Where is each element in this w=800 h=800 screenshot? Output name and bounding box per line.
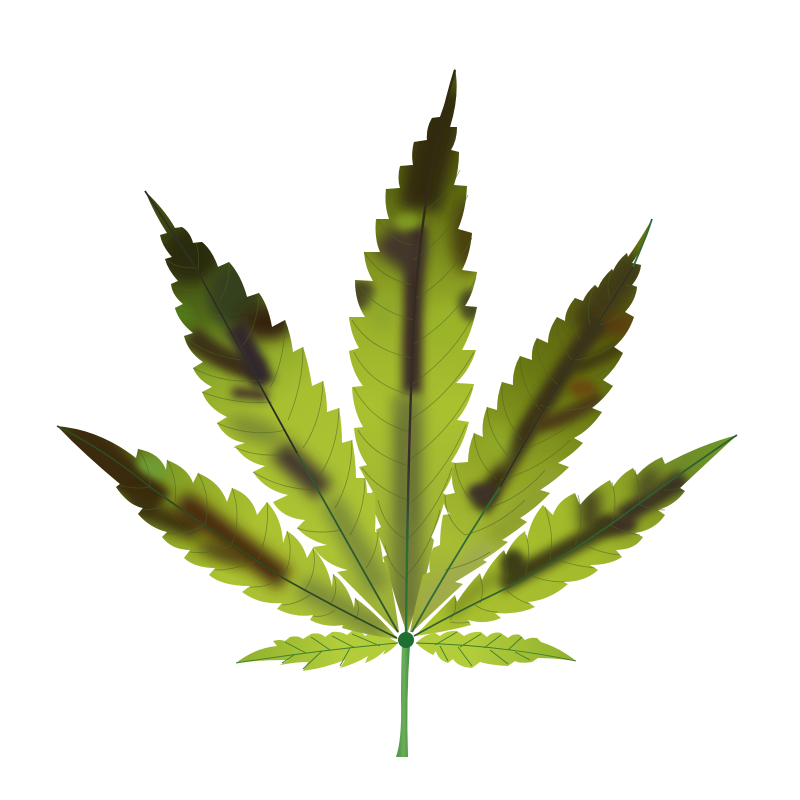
- node: leaflet junction: [398, 632, 414, 648]
- leaflet: upper left: [144, 190, 399, 633]
- veins: lower left: [120, 449, 358, 620]
- blotches: upper left: [160, 227, 380, 590]
- leaflet: small left: [236, 631, 398, 671]
- veins: upper left: [165, 243, 378, 568]
- blotches: lower right: [450, 470, 685, 615]
- blotches: upper right: [425, 260, 640, 605]
- veins: upper right: [445, 269, 637, 570]
- leaflet: lower left: [50, 420, 400, 645]
- leaflet: centre: [349, 68, 477, 632]
- leaflet: lower right: [410, 425, 745, 640]
- leaflet: upper right: [410, 218, 653, 632]
- blotches: lower left: [70, 432, 385, 632]
- stem: [396, 645, 410, 757]
- illustration: discoloured cannabis leaf: [56, 68, 738, 757]
- veins: lower right: [450, 470, 680, 623]
- veins: centre: [352, 170, 476, 580]
- blotches: centre: [346, 90, 482, 620]
- leaflet: small right: [416, 631, 576, 668]
